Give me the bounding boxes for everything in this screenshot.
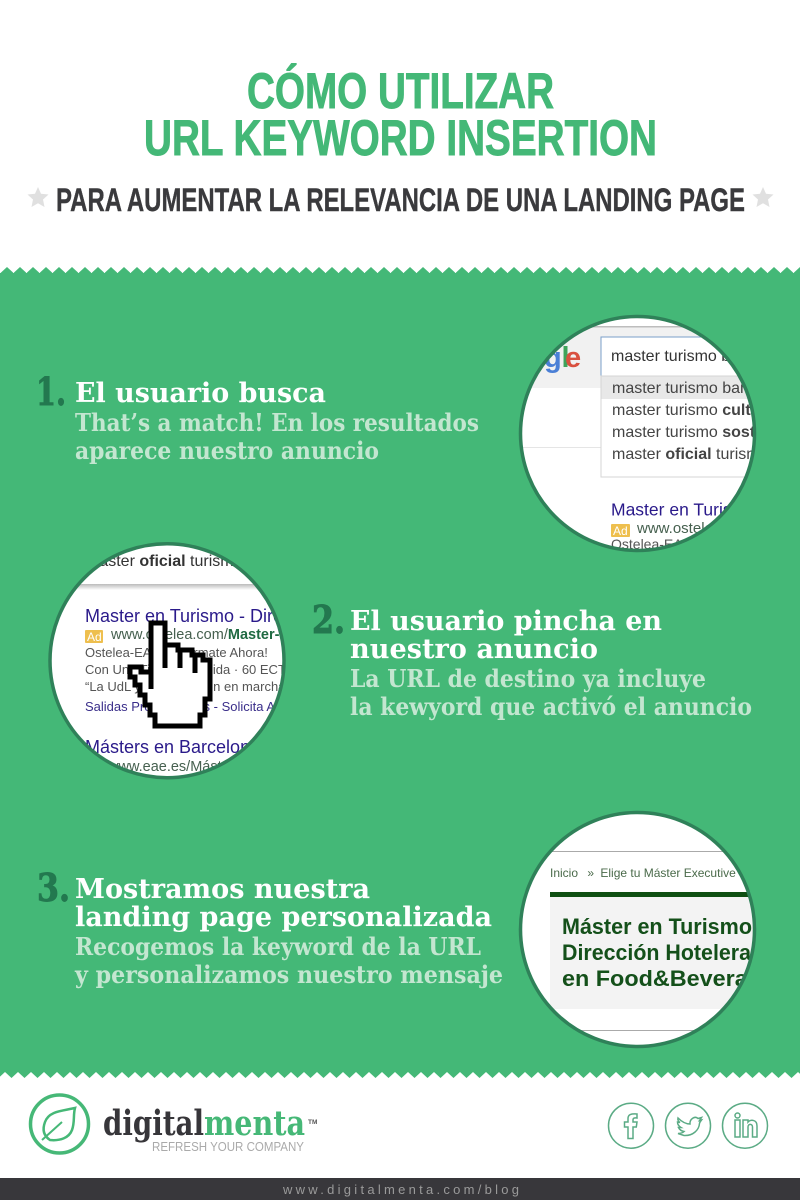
breadcrumb: Inicio » Elige tu Máster Executive <box>550 866 736 880</box>
tagline: REFRESH YOUR COMPANY <box>152 1140 305 1154</box>
google logo fragment: e <box>565 342 581 374</box>
step 1 description: aparece nuestro anuncio <box>75 436 379 465</box>
title <box>144 63 657 166</box>
suggestions dropdown <box>601 376 772 477</box>
icon: twitter <box>666 1103 710 1148</box>
icon: right star <box>752 187 774 207</box>
icon: leaf badge <box>30 1095 88 1153</box>
header <box>28 63 774 218</box>
step 3 heading <box>75 873 492 933</box>
step 2 number: 2. <box>312 597 345 642</box>
step 2 description: la kewyord que activó el anuncio <box>350 692 752 721</box>
icon: pixel hand cursor <box>130 623 210 726</box>
ad result: Master en Turismo <box>611 500 756 520</box>
landing heading: Dirección Hotelera <box>562 940 752 965</box>
website url: www.digitalmenta.com/blog <box>282 1182 519 1197</box>
circle: ad results with hand cursor <box>48 542 286 780</box>
landing heading: Máster en Turismo <box>562 914 752 939</box>
suggestions dropdown: master turismo cult <box>612 402 751 419</box>
suggestions dropdown: master oficial turism <box>612 446 760 463</box>
ad result: www.ostelea.com <box>636 520 754 537</box>
title: CÓMO UTILIZAR <box>247 63 554 119</box>
ad result text <box>85 608 282 771</box>
step 3 <box>37 865 503 989</box>
trademark: TM <box>308 1119 317 1126</box>
ad result: Ostelea-EAE <box>611 536 692 552</box>
step 2 heading: nuestro anuncio <box>350 633 598 665</box>
step 2 heading: El usuario pincha en <box>350 605 662 637</box>
wordmark <box>103 1103 305 1144</box>
circle: personalized landing page <box>510 812 775 1046</box>
landing heading: en Food&Beverage <box>562 966 775 991</box>
step 2 description: La URL de destino ya incluye <box>350 664 706 693</box>
ad result <box>611 502 727 549</box>
icon: facebook <box>608 1103 654 1148</box>
landing heading <box>562 918 752 986</box>
social icons <box>608 1103 768 1148</box>
search box: master turismo b <box>611 348 730 365</box>
icon: left star <box>28 187 48 207</box>
ad result: Ad <box>613 524 628 538</box>
step 3 heading: Mostramos nuestra <box>75 873 370 905</box>
ad result text: Salidas Profesionales - Solicita Admisión <box>85 699 320 714</box>
title: URL KEYWORD INSERTION <box>144 110 657 166</box>
step 2 heading <box>350 605 662 665</box>
step 1 description: That’s a match! En los resultados <box>75 408 479 437</box>
google logo fragment <box>546 346 580 373</box>
step 3 description <box>74 932 503 989</box>
wordmark: menta <box>204 1103 305 1144</box>
suggestions dropdown: master turismo sost <box>612 424 756 441</box>
step 1 <box>36 369 479 465</box>
suggestions dropdown: master turismo bar <box>612 380 746 397</box>
step 3 heading: landing page personalizada <box>75 901 492 933</box>
step 1 number: 1. <box>36 369 66 414</box>
google logo fragment: l <box>562 342 570 374</box>
google logo fragment: g <box>544 342 562 374</box>
step 3 description: Recogemos la keyword de la URL <box>75 932 481 961</box>
ad result text: Con Una Titulación Leida · 60 ECTS <box>85 662 295 677</box>
footer logo <box>30 1095 317 1154</box>
step 3 number: 3. <box>37 865 70 910</box>
circle: ad results with hand cursor: master oficial turismo <box>86 553 243 570</box>
ad result text: Master en Turismo - Dirección <box>85 606 325 626</box>
step 1 heading: El usuario busca <box>75 377 326 409</box>
step 2 <box>312 597 752 721</box>
step 2 description <box>350 664 752 721</box>
step 3 description: y personalizamos nuestro mensaje <box>74 960 503 989</box>
ad result text: Ad <box>87 630 102 644</box>
panel: green background <box>0 267 800 1078</box>
ad result text: “La UdL y EAE se unen en marcha <box>85 679 286 694</box>
icon: linkedin <box>722 1103 768 1148</box>
search box <box>600 336 737 376</box>
footer bar <box>0 1178 800 1200</box>
wordmark: digital <box>103 1103 204 1144</box>
ad result text: www.eae.es/Másters <box>107 759 242 775</box>
circle: google search suggestions <box>510 316 772 552</box>
step 1 description <box>75 408 479 465</box>
ad result text: www.ostelea.com/Master-T <box>110 627 288 643</box>
ad result text: Másters en Barcelona <box>85 737 261 757</box>
ad result text: Ostelea-EAE - Infórmate Ahora! <box>85 645 268 660</box>
